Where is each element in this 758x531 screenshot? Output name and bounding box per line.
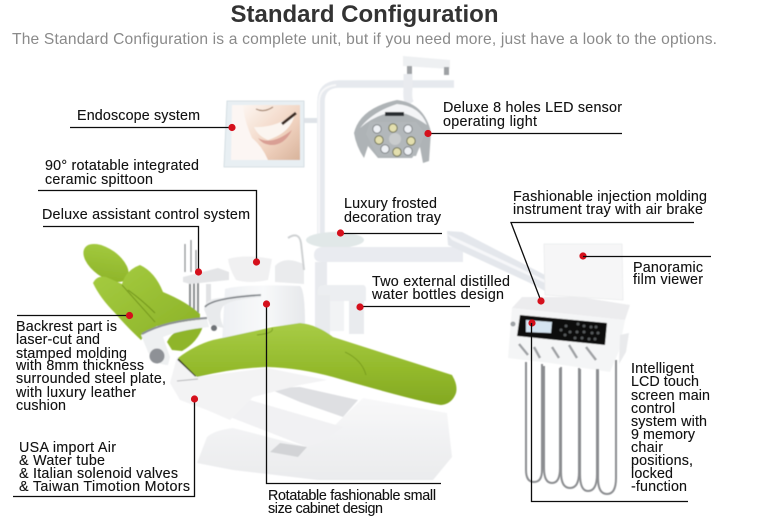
label: backrest: stamped molding xyxy=(16,346,127,362)
label: LCD control system: LCD touch xyxy=(631,374,699,390)
label: ceramic spittoon xyxy=(38,158,260,266)
label: LCD control system: screen main xyxy=(631,388,710,404)
label: backrest xyxy=(15,312,166,414)
label: decoration tray xyxy=(337,196,442,237)
label: operating light: operating light xyxy=(443,114,537,130)
label: rotatable cabinet: Rotatable fashionable small xyxy=(268,488,436,504)
LED operating light xyxy=(354,100,431,163)
label: assistant control xyxy=(42,207,250,276)
label: rotatable cabinet: size cabinet design xyxy=(268,501,383,517)
lamp arm xyxy=(319,56,454,236)
label: backrest: with 8mm thickness xyxy=(15,358,144,374)
label: LCD control system: 9 memory xyxy=(631,427,696,443)
film viewer xyxy=(544,244,623,300)
label: backrest: laser-cut and xyxy=(16,332,100,348)
label: usa import xyxy=(13,395,198,496)
label: rotatable cabinet xyxy=(263,300,441,517)
illustration: dental unit xyxy=(77,56,630,494)
label: decoration tray: decoration tray xyxy=(344,210,442,226)
label: endoscope system: Endoscope system xyxy=(77,108,200,124)
label: film viewer: film viewer xyxy=(633,272,703,288)
green backrest and headrest xyxy=(77,236,203,351)
label: endoscope system xyxy=(70,108,236,131)
spittoon, cabinet and assistant tray xyxy=(183,235,305,342)
label: decoration tray: Luxury frosted xyxy=(344,196,437,212)
label: backrest: surrounded steel plate, xyxy=(16,371,166,387)
monitor with smile photo xyxy=(224,101,317,167)
label: water bottles: Two external distilled xyxy=(372,274,510,290)
label: backrest: with luxury leather xyxy=(15,385,136,401)
chair base xyxy=(197,387,452,480)
label: LCD control system: system with xyxy=(631,414,707,430)
green seat cushion xyxy=(178,323,456,405)
instrument tray console xyxy=(508,297,630,372)
label: usa import: & Water tube xyxy=(19,453,105,469)
label: LCD control system xyxy=(528,319,710,502)
label: backrest: Backrest part is xyxy=(16,319,117,335)
label: LCD control system: -function xyxy=(631,479,687,495)
label: usa import: USA import Air xyxy=(19,440,116,456)
label: LCD control system: chair xyxy=(631,440,663,456)
label: film viewer: Panoramic xyxy=(633,260,703,276)
title: Standard Configuration xyxy=(230,1,498,28)
label: water bottles xyxy=(356,274,510,311)
label: usa import: & Taiwan Timotion Motors xyxy=(19,479,190,495)
label: operating light: Deluxe 8 holes LED sensor xyxy=(443,100,622,116)
subtitle: The Standard Configuration is a complete unit, but if you need more, just have a look to the options. xyxy=(12,31,717,48)
label: water bottles: water bottles design xyxy=(371,287,504,303)
label: operating light xyxy=(424,100,622,137)
label: LCD control system: Intelligent xyxy=(631,361,694,377)
decoration tray and post arm xyxy=(306,231,545,334)
label: instrument tray xyxy=(511,189,707,305)
water bottles xyxy=(316,285,366,335)
label: ceramic spittoon: ceramic spittoon xyxy=(45,172,153,188)
label: LCD control system: locked xyxy=(631,466,673,482)
label: instrument tray: instrument tray with air brake xyxy=(513,202,703,218)
chair body xyxy=(170,357,327,420)
label: LCD control system: control xyxy=(631,401,675,417)
label: instrument tray: Fashionable injection molding xyxy=(513,189,707,205)
chair arm and joint xyxy=(141,294,261,365)
label: LCD control system: positions, xyxy=(631,453,693,469)
label: usa import: & Italian solenoid valves xyxy=(19,466,178,482)
label: ceramic spittoon: 90° rotatable integrated xyxy=(45,158,199,174)
label: film viewer xyxy=(579,252,711,288)
label: assistant control: Deluxe assistant control system xyxy=(42,207,250,223)
label: backrest: cushion xyxy=(16,398,66,414)
instrument hoses xyxy=(526,360,616,494)
